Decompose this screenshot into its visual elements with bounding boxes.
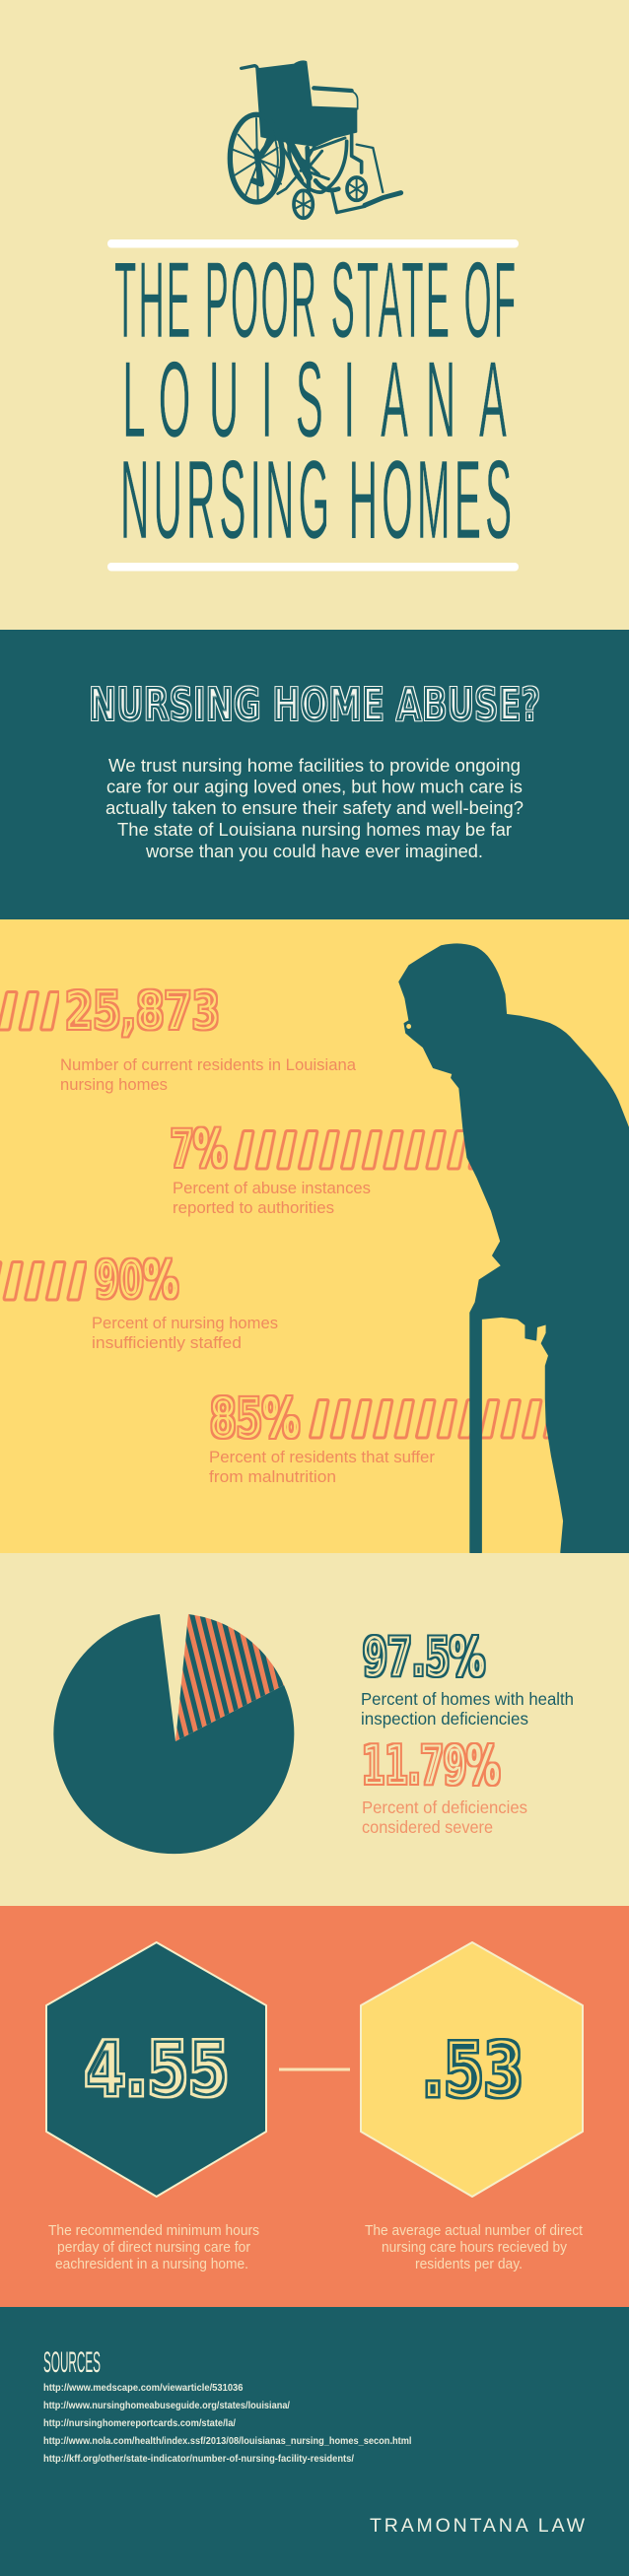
source links — [43, 2383, 412, 2465]
stat: 97.5%: inspection deficiencies — [361, 1709, 528, 1729]
stat: 7%: 7% — [171, 1119, 227, 1180]
pie chart — [53, 1614, 294, 1854]
intro text: care for our aging loved ones, but how much care is — [106, 777, 523, 796]
source links: http://www.medscape.com/viewarticle/531036 — [43, 2383, 244, 2394]
panel: sources footer — [0, 2307, 629, 2576]
source links: http://www.nola.com/health/index.ssf/2013/08/louisianas_nursing_homes_secon.html — [43, 2436, 412, 2447]
stat: 90%: insufficiently staffed — [92, 1334, 242, 1352]
stat: 11.79%: Percent of deficiencies — [362, 1797, 527, 1817]
title: NURSING HOMES — [120, 438, 512, 562]
stat: 85%: 85% — [210, 1387, 300, 1450]
caption: actual hours: nursing care hours recieved by — [382, 2239, 567, 2256]
stat: 11.79%: 11.79% — [362, 1734, 500, 1796]
panel: hours comparison — [0, 1906, 629, 2307]
icon: elderly man silhouette with cane — [399, 944, 629, 1552]
caption: recommended hours: perday of direct nursing care for — [57, 2239, 250, 2256]
stat: 85% — [209, 1387, 550, 1486]
divider: top white bar — [107, 239, 519, 248]
panel: pie chart section — [0, 1553, 629, 1906]
stat: 11.79% — [362, 1734, 527, 1837]
caption: recommended hours: eachresident in a nursing home. — [55, 2256, 248, 2272]
panel: header — [0, 0, 629, 630]
stat: 11.79%: considered severe — [362, 1817, 493, 1837]
caption: actual hours: The average actual number of direct — [365, 2222, 584, 2239]
stat: 7% — [171, 1119, 480, 1217]
caption: recommended hours: The recommended minimum hours — [48, 2222, 259, 2239]
intro text: worse than you could have ever imagined. — [145, 841, 483, 861]
hexagon: recommended 4.55: 4.55 — [85, 2025, 229, 2113]
title — [114, 240, 516, 562]
stat: 97.5%: 97.5% — [363, 1626, 485, 1688]
caption: actual hours — [365, 2222, 584, 2272]
stat: 90%: Percent of nursing homes — [92, 1315, 278, 1332]
source links: http://kff.org/other/state-indicator/number-of-nursing-facility-residents/ — [43, 2454, 354, 2465]
hexagon: actual .53: .53 — [422, 2026, 524, 2114]
stat: 25,873: nursing homes — [60, 1076, 168, 1094]
connector line — [279, 2068, 350, 2071]
panel: statistics with silhouette — [0, 919, 629, 1553]
caption: recommended hours — [48, 2222, 259, 2272]
stat: 85%: from malnutrition — [209, 1468, 336, 1486]
panel: nursing home abuse intro — [0, 630, 629, 919]
caption: actual hours: residents per day. — [415, 2256, 523, 2272]
stat: 90% — [0, 1251, 278, 1352]
intro text: We trust nursing home facilities to provide ongoing — [108, 755, 521, 776]
stat: 25,873: 25,873 — [65, 982, 220, 1042]
brand: Tramontana Law: TRAMONTANA LAW — [370, 2515, 586, 2537]
stat: 97.5% — [361, 1626, 574, 1729]
hexagon: actual .53 — [361, 1942, 583, 2197]
divider: bottom white bar — [107, 563, 519, 572]
stat: 7%: reported to authorities — [173, 1199, 334, 1217]
title: THE POOR STATE OF — [114, 240, 516, 361]
icon: wheelchair — [230, 61, 401, 218]
intro text: actually taken to ensure their safety and well-being? — [105, 797, 524, 818]
intro text — [105, 755, 524, 861]
intro text: The state of Louisiana nursing homes may be far — [117, 819, 512, 840]
stat: 25,873 — [0, 982, 357, 1094]
stat: 25,873: Number of current residents in Louisiana — [60, 1056, 357, 1074]
title: LOUISIANA — [122, 339, 507, 460]
hexagon: recommended 4.55 — [46, 1942, 266, 2197]
source links: http://nursinghomereportcards.com/state/la/ — [43, 2418, 236, 2429]
panel: sources footer: SOURCES — [43, 2346, 101, 2379]
source links: http://www.nursinghomeabuseguide.org/states/louisiana/ — [43, 2401, 290, 2411]
stat: 85%: Percent of residents that suffer — [209, 1449, 436, 1466]
stat: 90%: 90% — [95, 1251, 178, 1311]
stat: 7%: Percent of abuse instances — [173, 1180, 371, 1197]
stat: 97.5%: Percent of homes with health — [361, 1689, 574, 1709]
